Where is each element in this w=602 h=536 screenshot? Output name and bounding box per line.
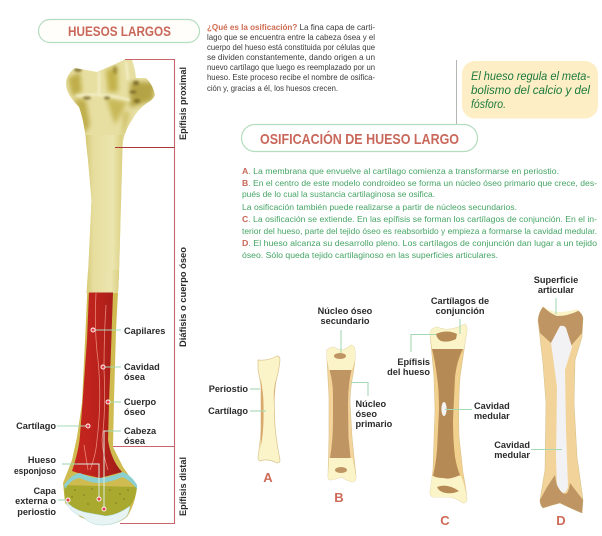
diagram B: B: [334, 490, 344, 505]
label: Epífisis distal: Epífisis distal: [178, 457, 188, 516]
text block: stages A to D: La osificación también puede realizarse a partir de núcleos secundarios.: [242, 202, 517, 212]
callouts on long bone: Cuerpo: [124, 397, 157, 407]
diagram C: medular: [474, 411, 510, 421]
callouts on long bone: [14, 326, 165, 517]
text block: stages A to D: A. La membrana que envuelve al cartílago comienza a transformarse en periostio.: [242, 166, 559, 176]
periosteum: [65, 500, 130, 525]
callouts on long bone: externa o: [15, 496, 56, 506]
brackets: [113, 60, 174, 524]
callouts on long bone: esponjoso: [14, 466, 56, 476]
label: Diáfisis o cuerpo óseo: Diáfisis o cuerpo óseo: [178, 246, 188, 347]
lower shaft wall and head: [63, 274, 137, 525]
text block: stages A to D: pués de lo cual la sustancia cartilaginosa se osifica.: [242, 189, 435, 199]
proximal epiphysis and upper shaft: [66, 60, 155, 274]
vertical divider: [456, 60, 458, 130]
diagram B: primario: [356, 419, 393, 429]
callouts on long bone: óseo: [124, 407, 146, 417]
diagram D: [494, 275, 583, 528]
heading: Osificación de hueso largo: OSIFICACIÓN DE HUESO LARGO: [260, 130, 459, 148]
diagram A: A: [263, 470, 273, 485]
callout: El hueso regula: fósforo.: [471, 97, 506, 111]
text block: stages A to D: óseo. Sólo queda tejido cartilaginoso en las superficies articulares.: [242, 250, 498, 260]
text block: ¿Qué es la osificación?: se dividen constantemente, dando origen a un: [207, 53, 375, 62]
spongy pores: [71, 488, 129, 505]
diagram D: Superficie: [534, 275, 578, 285]
diagram C: Cartílagos de: [431, 296, 489, 306]
capillaries: [84, 293, 108, 470]
diagram D: articular: [538, 285, 575, 295]
red medullary cavity: [72, 292, 122, 478]
diagram A: Periostio: [209, 384, 248, 394]
callout: El hueso regula: [462, 61, 598, 118]
text block: stages A to D: [242, 166, 597, 260]
diagram B: [318, 306, 393, 505]
label: Epífisis proximal: Epífisis proximal: [178, 67, 188, 140]
diagram D: D: [556, 513, 566, 528]
callouts on long bone: ósea: [124, 372, 146, 382]
text block: ¿Qué es la osificación?: [207, 23, 375, 93]
text block: stages A to D: C. La osificación se extiende. En las epífisis se forman los cartílagos de conjunción. En el in-: [242, 214, 597, 224]
shaft above the cavity: [86, 270, 119, 293]
diagram C: del hueso: [387, 367, 430, 377]
callouts on long bone: Cabeza: [124, 426, 157, 436]
diagram C: Cavidad: [474, 401, 510, 411]
spongy head: [64, 485, 137, 516]
diagram B: óseo: [356, 409, 377, 419]
diagram A: Cartílago: [208, 406, 248, 416]
diagram D: Cavidad: [494, 440, 530, 450]
heading: Osificación de hueso largo: [242, 124, 478, 152]
callouts on long bone: Hueso: [28, 455, 56, 465]
diagram C: Epífisis: [397, 357, 430, 367]
callout: El hueso regula: bolismo del calcio y del: [471, 83, 590, 97]
callouts on long bone: Capa: [34, 486, 57, 496]
text block: stages A to D: terior del hueso, parte del tejido óseo es reabsorbido y empieza a formarse la cavidad medular.: [242, 226, 597, 236]
diagram B: secundario: [320, 316, 370, 326]
long bone illustration: [60, 55, 160, 525]
text block: ¿Qué es la osificación?: cuerpo del hueso está constituida por células que: [207, 43, 375, 52]
title: Huesos largos: HUESOS LARGOS: [68, 24, 171, 39]
diagram C: conjunción: [436, 306, 485, 316]
title: Huesos largos: [38, 20, 200, 42]
diagram B: Núcleo: [356, 399, 387, 409]
callout: El hueso regula: El hueso regula el meta-: [471, 69, 590, 83]
callouts on long bone: Cartílago: [16, 421, 56, 431]
callouts on long bone: Cavidad: [124, 362, 160, 372]
callouts on long bone: Capilares: [124, 326, 165, 336]
diagram A: [208, 356, 280, 485]
text block: ¿Qué es la osificación?: hueso. Este proceso recibe el nombre de osifica-: [207, 73, 375, 82]
callouts on long bone: ósea: [124, 436, 146, 446]
text block: stages A to D: D. El hueso alcanza su desarrollo pleno. Los cartílagos de conjunción dan lugar a un tejido: [242, 238, 597, 248]
text block: ¿Qué es la osificación?: lago que se encuentra entre la cabeza ósea y el: [207, 33, 375, 42]
cartilage band: [64, 472, 137, 489]
diagram C: C: [440, 513, 450, 528]
diagram C: [387, 296, 510, 528]
text block: stages A to D: B. En el centro de este modelo condroideo se forma un núcleo óseo primario que crece, des-: [242, 178, 597, 188]
diagram D: medular: [494, 450, 530, 460]
text block: ¿Qué es la osificación?: nuevo cartílago que luego es reemplazado por un: [207, 63, 375, 72]
text block: ¿Qué es la osificación?: ción y, gracias a él, los huesos crecen.: [207, 84, 338, 93]
text block: ¿Qué es la osificación?: ¿Qué es la osificación? La fina capa de carti-: [207, 23, 375, 32]
diagram B: Núcleo óseo: [318, 306, 373, 316]
callouts on long bone: periostio: [17, 507, 56, 517]
